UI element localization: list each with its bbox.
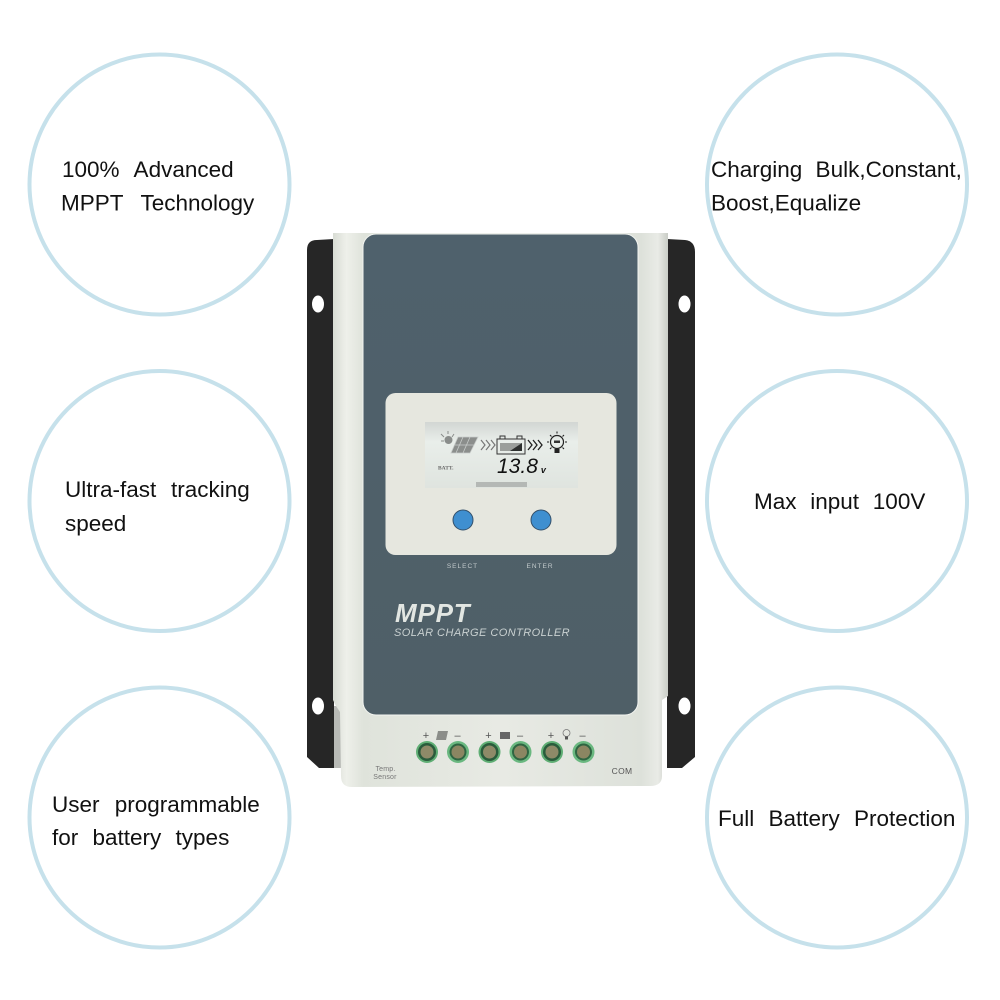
- terminal symbols: –: [579, 730, 586, 742]
- circle: User programmable for battery types: [30, 688, 290, 948]
- terminal symbols: [423, 730, 586, 742]
- solar charge controller device: [307, 233, 695, 787]
- arrows: panel to battery: [481, 440, 495, 450]
- label: Temp. Sensor: Temp.: [375, 766, 396, 773]
- reading: 13.8 V: 13.8 v: [497, 455, 547, 478]
- terminal 5: [541, 741, 563, 763]
- circle: Ultra-fast tracking speed: [30, 371, 290, 631]
- bracket shadow beside body: [334, 706, 342, 768]
- icon: light bulb: [547, 432, 567, 453]
- circle: 100% Advanced MPPT Technology: MPPT Technology: [61, 190, 255, 216]
- terminal 3: [478, 741, 500, 763]
- circle: Max input 100V: Max input 100V: [754, 489, 925, 514]
- button: select: [453, 510, 473, 530]
- circle: Ultra-fast tracking speed: speed: [65, 511, 126, 536]
- label: ENTER: ENTER: [526, 563, 554, 570]
- terminal 1: [416, 741, 438, 763]
- circle: Charging Bulk, Constant, Boost, Equalize: Charging Bulk,Constant,: [711, 157, 962, 182]
- subtitle: solar charge controller: SOLAR CHARGE CONTROLLER: [394, 627, 570, 639]
- circle: User programmable for battery types: User programmable: [52, 792, 260, 817]
- terminal 6: [572, 741, 594, 763]
- terminal symbols: +: [485, 730, 492, 742]
- circle: Max input 100V: [707, 371, 967, 631]
- button: enter: [531, 510, 551, 530]
- circle: 100% Advanced MPPT Technology: [30, 54, 290, 314]
- circle: Charging Bulk, Constant, Boost, Equalize: [707, 54, 967, 314]
- circle: 100% Advanced MPPT Technology: 100% Advanced: [62, 157, 234, 182]
- icon: solar panel: [451, 437, 478, 453]
- LCD screen: [425, 422, 578, 488]
- brand: MPPT: MPPT: [395, 598, 472, 628]
- left mounting bracket: [307, 239, 334, 768]
- label: SELECT: SELECT: [447, 563, 478, 570]
- circle: Charging Bulk, Constant, Boost, Equalize: Boost,Equalize: [711, 190, 861, 216]
- label: Temp. Sensor: Sensor: [373, 774, 397, 781]
- screw terminals: [416, 741, 594, 763]
- terminal symbols: –: [454, 730, 461, 742]
- label: BATT.: BATT.: [438, 466, 454, 472]
- label: COM: COM: [612, 766, 632, 776]
- icon: sun: [441, 431, 454, 444]
- terminal 2: [447, 741, 469, 763]
- circle: Full Battery Protection: [707, 688, 967, 948]
- terminal 4: [510, 741, 532, 763]
- segment bar: [476, 482, 527, 487]
- display bezel: [386, 393, 616, 555]
- dark front panel: [363, 234, 638, 715]
- terminal symbols: +: [548, 730, 554, 742]
- terminal symbols: –: [517, 730, 524, 742]
- controller body: [333, 233, 668, 787]
- circle: Ultra-fast tracking speed: Ultra-fast tracking: [65, 477, 250, 502]
- circle: User programmable for battery types: for battery types: [52, 825, 229, 850]
- right mounting bracket: [667, 239, 695, 768]
- arrows: battery to load: [528, 440, 542, 450]
- icon: battery: [497, 436, 525, 454]
- circle: Full Battery Protection: Full Battery Protection: [718, 806, 955, 831]
- terminal symbols: +: [423, 730, 429, 742]
